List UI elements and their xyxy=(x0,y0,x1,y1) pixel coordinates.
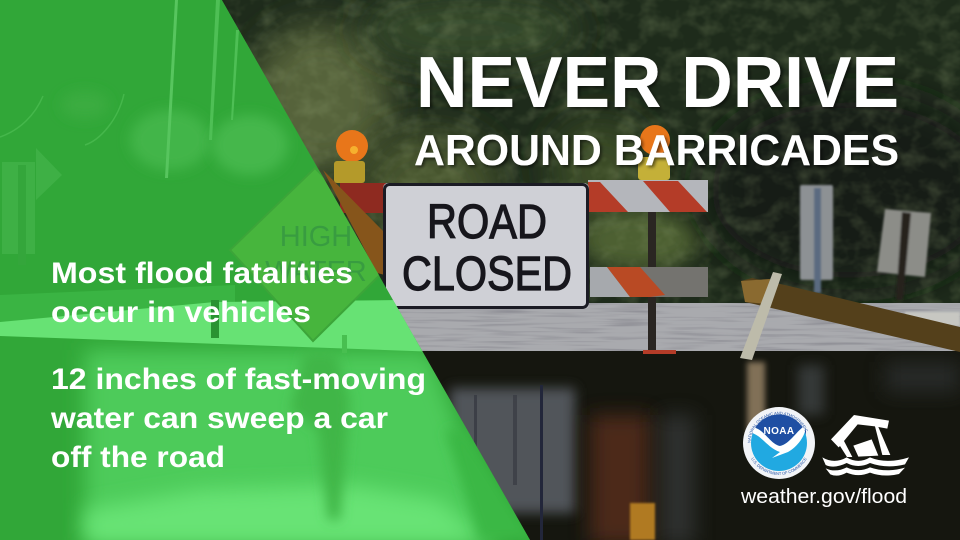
water: dark reflections xyxy=(422,351,960,540)
background photo: flooded road with barricade xyxy=(222,0,960,540)
icon: flooded house xyxy=(822,415,909,476)
washed-out trees and poles xyxy=(0,0,288,265)
barricade rear rails and post xyxy=(323,170,708,354)
fact: fatalities: Most flood fatalities xyxy=(51,257,353,290)
trees backdrop xyxy=(222,0,960,303)
title: AROUND BARRICADES xyxy=(414,126,899,175)
road closed sign: ROAD xyxy=(427,196,547,249)
fact: fast-moving water: 12 inches of fast-moving xyxy=(51,363,426,396)
road closed sign: CLOSED xyxy=(402,248,572,301)
title: NEVER DRIVE xyxy=(416,43,899,123)
lower water with soft reflections xyxy=(72,336,530,540)
website link: weather.gov/flood xyxy=(740,485,907,508)
water: bright sheet xyxy=(0,303,960,353)
icon: NOAA logo: NOAA xyxy=(763,426,795,437)
panel base xyxy=(0,0,530,540)
title xyxy=(414,43,899,175)
fact: fast-moving water: water can sweep a car xyxy=(50,402,388,435)
back of roadside signs xyxy=(800,185,931,300)
warning lights xyxy=(334,125,670,183)
fact: fatalities: occur in vehicles xyxy=(51,296,311,329)
fact: fatalities xyxy=(51,257,353,329)
fallen barricade beam xyxy=(740,272,960,360)
high water diamond sign: WATER xyxy=(265,256,367,288)
green translucent panel xyxy=(0,0,535,540)
icon: NOAA logo: U.S. DEPARTMENT OF COMMERCE xyxy=(752,457,807,475)
high water diamond sign xyxy=(211,167,380,353)
fact: fast-moving water: off the road xyxy=(51,441,225,474)
bright water and bank xyxy=(0,285,440,352)
fact: fast-moving water xyxy=(50,363,426,474)
road closed sign xyxy=(383,183,589,309)
icon: NOAA logo xyxy=(743,407,815,479)
high water diamond sign: HIGH xyxy=(280,221,352,253)
icon: NOAA logo: NATIONAL OCEANIC AND ATMOSPHERIC xyxy=(748,412,808,443)
